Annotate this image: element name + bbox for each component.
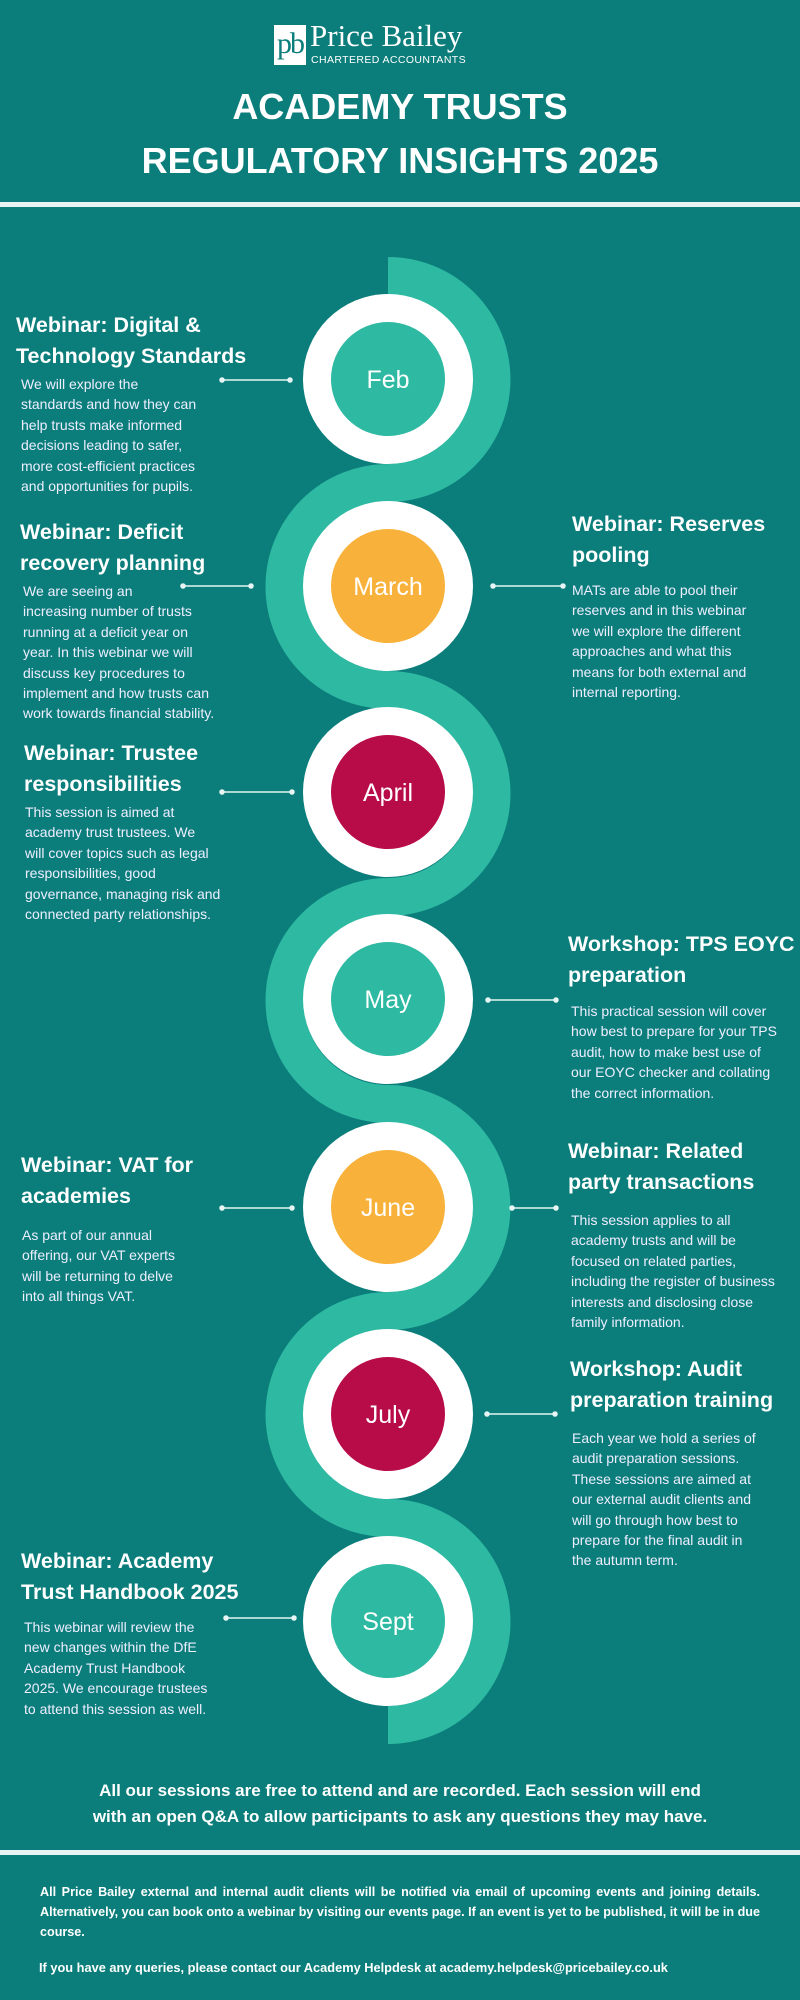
text: Reserves pooling: means for both external and [572,664,746,680]
text: Deficit recovery: Webinar: Deficit [20,520,183,544]
text: Trustee: connected party relationships. [25,906,211,922]
text: Digital & Technology: We will explore the [21,376,138,392]
text: Deficit recovery: year. In this webinar we will [23,644,193,660]
text: Deficit recovery: running at a deficit year on [23,624,188,640]
text: Reserves pooling: MATs are able to pool their [572,582,738,598]
title [142,86,658,181]
text: Related party: including the register of business [571,1273,775,1289]
text: Digital & Technology [16,313,246,494]
circle: Sept [303,1536,473,1706]
circle: April [303,707,473,877]
text: Audit prep: Each year we hold a series of [572,1430,756,1446]
closing statement: with an open Q&A to allow participants to ask any questions they may have. [93,1807,707,1826]
text: Handbook: Webinar: Academy [21,1549,213,1573]
text: Digital & Technology: Webinar: Digital & [16,313,201,337]
text: TPS: Workshop: TPS EOYC [568,932,795,956]
text: Deficit recovery: discuss key procedures to [23,665,185,681]
text: Trustee: academy trust trustees. We [25,824,195,840]
arrows [181,378,565,1620]
text: Reserves pooling: reserves and in this webinar [572,602,746,618]
text: Audit prep: prepare for the final audit in [572,1532,742,1548]
circle: June: June [361,1194,415,1222]
footer note: All Price Bailey external and internal audit clients will be notified via email of upcoming events and joining details. Alternatively, you can book onto a webinar by visiting our events page. If an event is yet to be published, it will be in due course. [40,1885,760,1939]
text: Trustee: responsibilities [24,772,182,796]
circle: July [303,1329,473,1499]
text: Reserves pooling: we will explore the different [572,623,741,639]
icon: pb box [274,25,306,65]
title: ACADEMY TRUSTS [232,86,568,127]
text: Handbook: Academy Trust Handbook [24,1660,185,1676]
text: VAT: academies [21,1184,131,1208]
circle: March [303,501,473,671]
text: Reserves pooling [572,512,765,700]
text: Digital & Technology: Technology Standards [16,344,246,368]
text: Reserves pooling: pooling [572,542,650,566]
text: VAT: offering, our VAT experts [22,1247,175,1263]
text: TPS: the correct information. [571,1085,714,1101]
closing statement [92,1781,707,1826]
circle: July: July [366,1401,411,1429]
text: TPS: This practical session will cover [571,1003,766,1019]
closing statement: All our sessions are free to attend and are recorded. Each session will end [99,1781,701,1800]
text: Related party: interests and disclosing close [571,1294,753,1310]
circle: June [303,1122,473,1292]
text: Digital & Technology: decisions leading to safer, [21,437,182,453]
circle: March: March [353,573,423,601]
circle: Feb: Feb [366,366,410,394]
text: Deficit recovery: work towards financial stability. [23,705,214,721]
text: Digital & Technology: help trusts make informed [21,417,182,433]
title: REGULATORY INSIGHTS 2025 [142,140,658,181]
text: Related party: academy trusts and will be [571,1232,736,1248]
text: Handbook: 2025. We encourage trustees [24,1680,207,1696]
text: VAT: will be returning to delve [22,1268,173,1284]
text: Related party [568,1139,775,1330]
text: VAT: into all things VAT. [22,1288,135,1304]
text: Trustee: will cover topics such as legal [25,845,209,861]
text: Reserves pooling: Webinar: Reserves [572,512,765,536]
text: VAT: As part of our annual [22,1227,152,1243]
icon: pb box: pb [277,27,303,60]
text: Related party: This session applies to all [571,1212,731,1228]
contact line: If you have any queries, please contact our Academy Helpdesk at academy.helpdesk@pricebailey.co.uk [39,1960,668,1975]
logo text: Price Bailey [310,18,462,53]
text: Digital & Technology: standards and how they can [21,396,196,412]
text: Deficit recovery: We are seeing an [23,583,132,599]
text: Digital & Technology: and opportunities for pupils. [21,478,193,494]
text: Audit prep: will go through how best to [572,1512,738,1528]
circle: April: April [363,779,413,807]
text: Deficit recovery: increasing number of trusts [23,603,192,619]
text: Deficit recovery [20,520,214,721]
text: Audit prep: our external audit clients and [572,1491,751,1507]
text: Audit prep: the autumn term. [572,1552,678,1568]
text: Audit prep [570,1357,773,1568]
text: TPS: our EOYC checker and collating [571,1064,770,1080]
text: TPS [568,932,795,1101]
text: Handbook: This webinar will review the [24,1619,194,1635]
text: Audit prep: Workshop: Audit [570,1357,742,1381]
text: VAT [21,1153,193,1304]
circle: May: May [364,986,412,1014]
text: Audit prep: These sessions are aimed at [572,1471,751,1487]
text: Handbook: Trust Handbook 2025 [21,1580,238,1604]
text: Trustee: Webinar: Trustee [24,741,198,765]
text: Handbook: new changes within the DfE [24,1639,197,1655]
text: TPS: audit, how to make best use of [571,1044,761,1060]
text: Reserves pooling: approaches and what this [572,643,732,659]
text: Digital & Technology: more cost-efficient practices [21,458,195,474]
text: Related party: focused on related parties, [571,1253,736,1269]
s-curve band [284,276,492,1725]
text: Deficit recovery: recovery planning [20,550,205,574]
text: Audit prep: preparation training [570,1388,773,1412]
text: Related party: Webinar: Related [568,1139,743,1163]
text: Related party: party transactions [568,1170,754,1194]
text: Trustee: governance, managing risk and [25,886,220,902]
circle: Sept: Sept [362,1608,414,1636]
text: Handbook: to attend this session as well. [24,1701,206,1717]
circle: May [303,914,473,1084]
text: VAT: Webinar: VAT for [21,1153,193,1177]
text: Trustee [24,741,220,922]
logo [274,18,466,66]
text: Related party: family information. [571,1314,685,1330]
logo: CHARTERED ACCOUNTANTS [311,54,466,66]
text: Trustee: This session is aimed at [25,804,174,820]
text: Audit prep: audit preparation sessions. [572,1450,739,1466]
text: Trustee: responsibilities, good [25,865,156,881]
circle: Feb [303,294,473,464]
text: Deficit recovery: implement and how trusts can [23,685,209,701]
text: TPS: how best to prepare for your TPS [571,1023,777,1039]
text: Reserves pooling: internal reporting. [572,684,681,700]
text: Handbook [21,1549,238,1717]
text: TPS: preparation [568,962,686,986]
